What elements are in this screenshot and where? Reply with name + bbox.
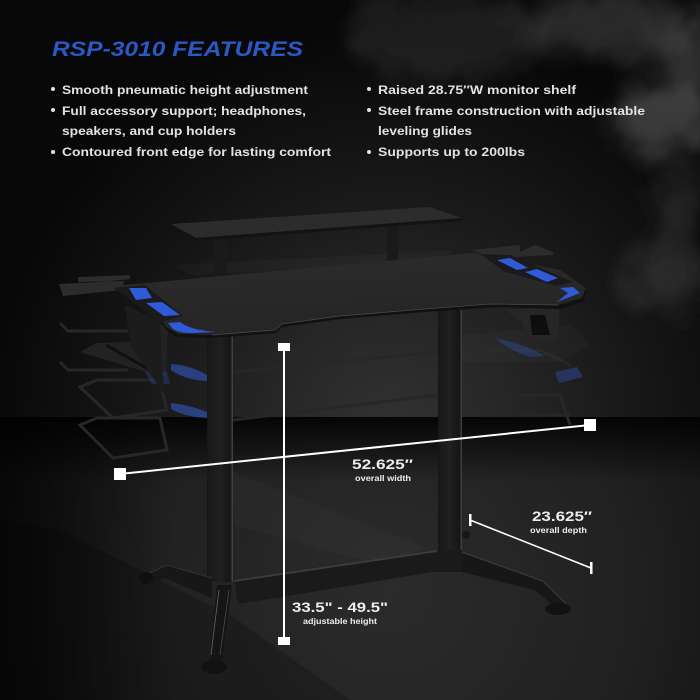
label: adjustable height: 33.5" - 49.5" (292, 599, 388, 615)
title: RSP-3010 FEATURES (52, 38, 303, 61)
feature list: right column: Steel frame construction with adjustable (378, 104, 645, 118)
left side tray (59, 275, 130, 296)
desk (59, 207, 586, 674)
feature list: left column: speakers, and cup holders (62, 124, 236, 138)
desktop surface (114, 253, 586, 338)
label: adjustable height: adjustable height (303, 616, 377, 626)
background: wall (0, 0, 700, 418)
background: floor (0, 417, 700, 700)
dimension line: width (114, 419, 596, 480)
feature list: left column: Smooth pneumatic height adjustment (62, 83, 308, 97)
blue accent pads (129, 258, 580, 333)
monitor shelf (171, 207, 462, 241)
smoke (345, 0, 700, 310)
feature list: left column: Full accessory support; headphones, (62, 104, 306, 118)
feature list: left column: Contoured front edge for lasting comfort (62, 145, 331, 159)
label: overall width (352, 456, 413, 483)
label: overall depth: overall depth (530, 525, 587, 535)
dimension line: depth (469, 514, 592, 574)
right cable rail (480, 254, 573, 286)
label: overall width: overall width (355, 473, 411, 483)
feature list: right column (367, 83, 645, 159)
feature list: right column: Supports up to 200lbs (378, 145, 525, 159)
label: overall depth: 23.625″ (532, 508, 592, 524)
dimension line: height (278, 343, 290, 645)
feature list: left column (51, 83, 331, 159)
reflections on the wall (60, 250, 590, 458)
label: overall width: 52.625″ (352, 456, 413, 472)
left bracket (125, 305, 165, 395)
label: overall depth (530, 508, 592, 535)
desk legs (207, 310, 462, 582)
label: adjustable height (292, 599, 388, 626)
desk base (139, 531, 571, 674)
feature list: right column: Raised 28.75″W monitor shelf (378, 83, 577, 97)
monitor shelf supports (214, 226, 398, 276)
right headphone hook (505, 306, 560, 340)
feature list: right column: leveling glides (378, 124, 472, 138)
right side tray (472, 245, 553, 258)
left cable rail (114, 285, 183, 322)
